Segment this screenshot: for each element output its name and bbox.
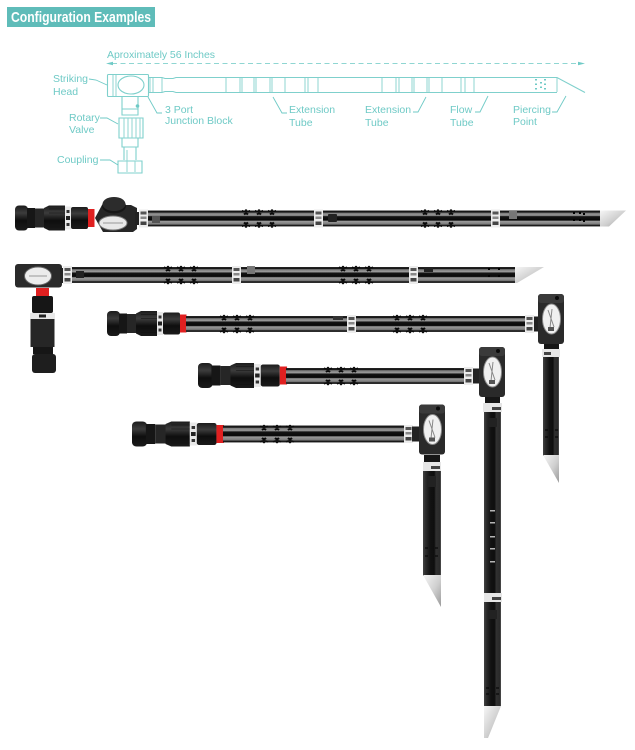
configuration 2: [15, 264, 544, 373]
part labels: [53, 73, 566, 166]
line art: striking head and junction block: [108, 74, 148, 96]
length dimension arrow: [106, 49, 585, 65]
rotary valve below head: [30, 288, 56, 373]
configuration 4: [198, 347, 505, 738]
label: coupling: [57, 154, 118, 166]
label: flow tube: Flow: [450, 104, 473, 116]
label: junction block: Junction Block: [165, 115, 233, 127]
label: extension tube 1: Extension: [289, 104, 335, 116]
junction block with rotary knob: [95, 197, 137, 232]
label: extension tube 1: Tube: [289, 117, 313, 129]
length dimension arrow: Aproximately 56 Inches: [107, 49, 215, 61]
label: extension tube 2: Extension: [365, 104, 411, 116]
label: flow tube: [450, 96, 488, 129]
label: striking head: Head: [53, 86, 78, 98]
label: extension tube 2: Tube: [365, 117, 389, 129]
label: striking head: [53, 73, 107, 98]
configuration 1: [15, 197, 626, 232]
configuration 3: [107, 294, 564, 483]
label: coupling: Coupling: [57, 154, 99, 166]
label: extension tube 1: [273, 97, 335, 129]
label: flow tube: Tube: [450, 117, 474, 129]
configuration 5: [132, 404, 445, 607]
label: junction block: [148, 97, 233, 127]
label: striking head: Striking: [53, 73, 88, 85]
label: rotary valve: [69, 112, 118, 136]
label: piercing point: Point: [513, 116, 537, 128]
label: piercing point: [513, 96, 566, 128]
label: rotary valve: Valve: [69, 124, 95, 136]
line art: tube assembly: [148, 78, 585, 92]
title: Configuration Examples: [11, 9, 151, 26]
labelled line diagram: [53, 49, 585, 173]
label: junction block: 3 Port: [165, 104, 193, 116]
label: extension tube 2: [365, 97, 426, 129]
line art: rotary valve and coupling: [118, 96, 143, 173]
label: piercing point: Piercing: [513, 104, 551, 116]
label: rotary valve: Rotary: [69, 112, 101, 124]
